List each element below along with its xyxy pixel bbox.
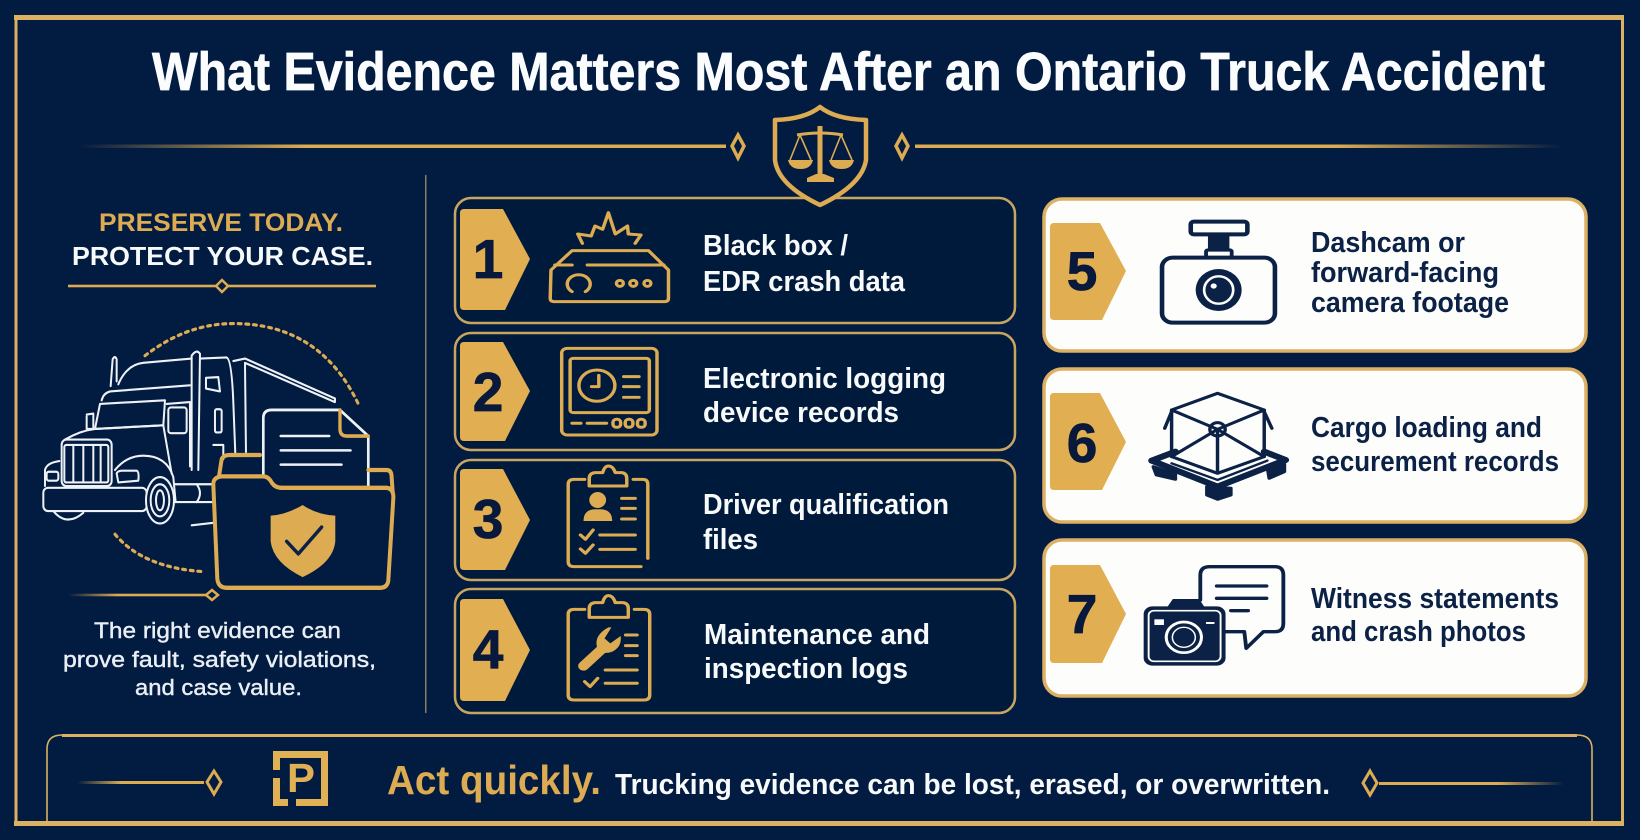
label 7: Witness statements (1311, 583, 1559, 615)
icon: driver clipboard (568, 466, 648, 567)
label 7: and crash photos (1311, 616, 1526, 648)
badge 5: 5 (1067, 240, 1097, 302)
card 4: maintenance (455, 589, 1015, 713)
label 7 (1311, 583, 1559, 648)
left panel heading (72, 209, 373, 271)
badge 1: 1 (473, 228, 503, 290)
left panel body text: and case value. (135, 675, 302, 700)
icon: shield check (271, 505, 335, 577)
icon: dashcam (1162, 222, 1275, 323)
card 2: ELD (455, 333, 1015, 450)
lower divider (68, 590, 218, 600)
icon: camera and speech bubble (1145, 567, 1283, 665)
label 1: EDR crash data (703, 266, 906, 298)
illustration: truck with evidence folder (43, 324, 393, 588)
label 6: Cargo loading and (1311, 412, 1542, 444)
card 3: driver files (455, 460, 1015, 580)
bottom callout bar (47, 734, 1592, 822)
badge 6 (1050, 393, 1126, 490)
label 6: securement records (1311, 446, 1559, 478)
left panel body text: prove fault, safety violations, (63, 647, 376, 672)
icon: folder (213, 455, 393, 588)
label 5 (1311, 227, 1509, 319)
left panel body text (63, 618, 376, 700)
callout right ornament (1363, 771, 1564, 795)
left panel body text: The right evidence can (94, 618, 341, 643)
badge 7 (1050, 565, 1126, 663)
label 4: inspection logs (704, 653, 908, 685)
icon: black box (550, 213, 668, 302)
badge 1 (460, 209, 530, 310)
icon: P logo (276, 754, 324, 802)
callout left ornament (77, 771, 221, 794)
icon: cargo pallet (1152, 393, 1286, 499)
title divider left (78, 135, 744, 158)
panel vertical divider (425, 175, 426, 713)
label 4 (704, 619, 930, 685)
label 2 (703, 363, 946, 429)
icon: logging device (562, 348, 657, 435)
heading divider (68, 280, 376, 292)
icon: P logo: P (287, 755, 315, 801)
left panel heading: PRESERVE TODAY. (99, 209, 343, 237)
label 1: Black box / (703, 230, 848, 262)
badge 4 (460, 599, 530, 701)
badge 7: 7 (1067, 583, 1097, 645)
title divider right (896, 135, 1564, 158)
callout text: Trucking evidence can be lost, erased, or overwritten. (615, 769, 1330, 801)
label 5: forward-facing (1311, 257, 1499, 289)
left panel heading: PROTECT YOUR CASE. (72, 241, 373, 271)
label 2: Electronic logging (703, 363, 946, 395)
badge 4: 4 (473, 618, 504, 680)
badge 3 (460, 469, 530, 570)
callout text (387, 757, 1330, 803)
badge 3: 3 (473, 488, 503, 550)
icon: wrench clipboard (568, 596, 650, 700)
badge 5 (1050, 223, 1126, 320)
card 7: witness (1044, 540, 1586, 696)
label 1 (703, 230, 906, 298)
badge 2: 2 (473, 361, 503, 423)
label 3: files (703, 524, 758, 556)
label 3 (703, 489, 949, 556)
label 2: device records (703, 397, 899, 429)
icon: scales of justice shield (775, 107, 866, 205)
label 5: Dashcam or (1311, 227, 1465, 259)
label 6 (1311, 412, 1559, 478)
card 5: dashcam (1044, 199, 1586, 351)
card 1: black box (455, 198, 1015, 323)
card 6: cargo (1044, 369, 1586, 522)
label 3: Driver qualification (703, 489, 949, 521)
badge 6: 6 (1067, 412, 1097, 474)
left panel (43, 209, 393, 700)
icon: document (263, 410, 368, 491)
dotted arcs (115, 324, 358, 572)
badge 2 (460, 342, 530, 441)
label 5: camera footage (1311, 287, 1509, 319)
label 4: Maintenance and (704, 619, 930, 651)
callout text: Act quickly. (387, 757, 601, 803)
icon: truck (43, 352, 335, 525)
